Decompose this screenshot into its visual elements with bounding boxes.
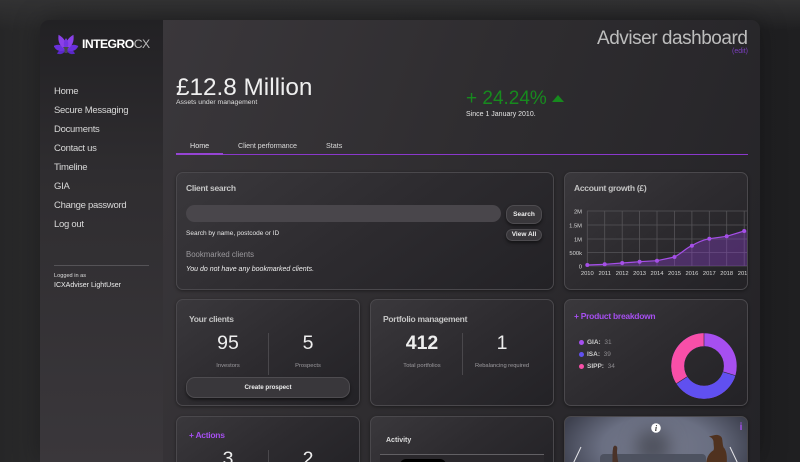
sidebar navigation [54, 86, 128, 230]
line chart: 2013 [633, 271, 646, 277]
line chart: 2014 [651, 271, 664, 277]
growth figure: + 24.24% [466, 88, 547, 109]
line chart: 2012 [616, 271, 629, 277]
stat: total portfolios: 412 [406, 332, 438, 354]
stat: investors: Investors [216, 363, 240, 369]
create prospect button: Create prospect [244, 384, 292, 391]
search button: Search [513, 211, 535, 218]
panel: client search [176, 172, 554, 290]
stat: prospects: Prospects [295, 363, 321, 369]
panel: account growth [564, 172, 748, 290]
photo: birds and controls [573, 422, 743, 462]
search button [506, 205, 542, 224]
left bird [612, 446, 619, 462]
tabs: Client performance [238, 141, 297, 150]
sidebar navigation: Change password [54, 200, 126, 211]
photo: birds and controls: i [655, 424, 658, 433]
sidebar navigation: Timeline [54, 162, 87, 173]
right chevron [730, 447, 739, 462]
panel: your clients [176, 299, 360, 406]
heading: Activity [386, 437, 411, 444]
sidebar navigation: Secure Messaging [54, 105, 128, 116]
view all button: View All [512, 231, 536, 238]
sidebar navigation: Documents [54, 124, 100, 135]
stat: total portfolios: Total portfolios [403, 363, 441, 369]
bookmarked heading: Bookmarked clients [186, 250, 254, 259]
stat: investors: 95 [217, 332, 239, 354]
line chart: 2016 [685, 271, 698, 277]
divider and tab [380, 454, 544, 462]
heading: Account growth (£) [574, 183, 646, 193]
line chart: 2M [574, 210, 582, 216]
stat: prospects [295, 332, 321, 369]
tabs [176, 141, 748, 155]
line chart [569, 210, 748, 277]
logo wordmark: INTEGROCX [82, 37, 150, 51]
page title: Adviser dashboard [597, 28, 747, 49]
line chart: 500k [569, 251, 582, 257]
growth figure [466, 88, 564, 118]
stat: rebalancing required [475, 332, 529, 369]
heading: + Product breakdown [574, 311, 655, 321]
logged in block: ICXAdviser LightUser [54, 282, 121, 289]
logged in block: Logged in as [54, 273, 86, 279]
tabs: Stats [326, 141, 342, 150]
assets under management: £12.8 Million [176, 74, 312, 101]
tabs: Home [190, 141, 209, 150]
overlay caption [600, 454, 706, 462]
left chevron [572, 447, 581, 462]
stat: prospects: 5 [303, 332, 313, 354]
stat: total portfolios [403, 332, 441, 369]
sidebar navigation: Home [54, 86, 78, 97]
panel: activity [370, 416, 554, 462]
panel: product breakdown [564, 299, 748, 406]
legend: SIPP: 34 [587, 363, 615, 370]
search input [186, 205, 501, 222]
smudge shadow in photo [635, 429, 671, 462]
line chart: 2017 [703, 271, 716, 277]
purple info marker: i [740, 422, 743, 433]
line chart: 2011 [598, 271, 611, 277]
bookmarked message: You do not have any bookmarked clients. [186, 266, 314, 273]
logo [54, 34, 150, 54]
icon: up arrow [552, 95, 564, 102]
icon: lotus logo mark [54, 34, 78, 54]
heading: Portfolio management [383, 314, 467, 324]
heading: Your clients [189, 314, 234, 324]
logged in block [54, 265, 149, 292]
line chart: 2018 [720, 271, 733, 277]
line chart: 2015 [668, 271, 681, 277]
panel: portfolio management [370, 299, 554, 406]
line chart: 0 [579, 264, 582, 270]
stat: rebalancing required: 1 [497, 332, 507, 354]
growth figure: Since 1 January 2010. [466, 111, 536, 118]
panel: photo card [564, 416, 748, 462]
legend: GIA: 31 [587, 339, 612, 346]
line chart: 1M [574, 238, 582, 244]
panel: actions [176, 416, 360, 462]
legend [579, 339, 615, 370]
assets under management: Assets under management [176, 99, 257, 106]
heading: Client search [186, 183, 236, 193]
edit link: (edit) [732, 48, 748, 55]
info icon [651, 423, 661, 433]
hint text: Search by name, postcode or ID [186, 230, 279, 237]
view all button [506, 229, 542, 241]
line chart: 2010 [581, 271, 594, 277]
create prospect button [186, 377, 350, 398]
sidebar navigation: GIA [54, 181, 70, 192]
donut chart [671, 333, 737, 399]
right bird [706, 435, 727, 462]
line chart: 1.5M [569, 224, 582, 230]
sidebar navigation: Contact us [54, 143, 97, 154]
stat: investors [216, 332, 240, 369]
heading: + Actions [189, 430, 225, 440]
sidebar navigation: Log out [54, 219, 84, 230]
legend: ISA: 39 [587, 351, 611, 358]
stat: rebalancing required: Rebalancing required [475, 363, 529, 369]
